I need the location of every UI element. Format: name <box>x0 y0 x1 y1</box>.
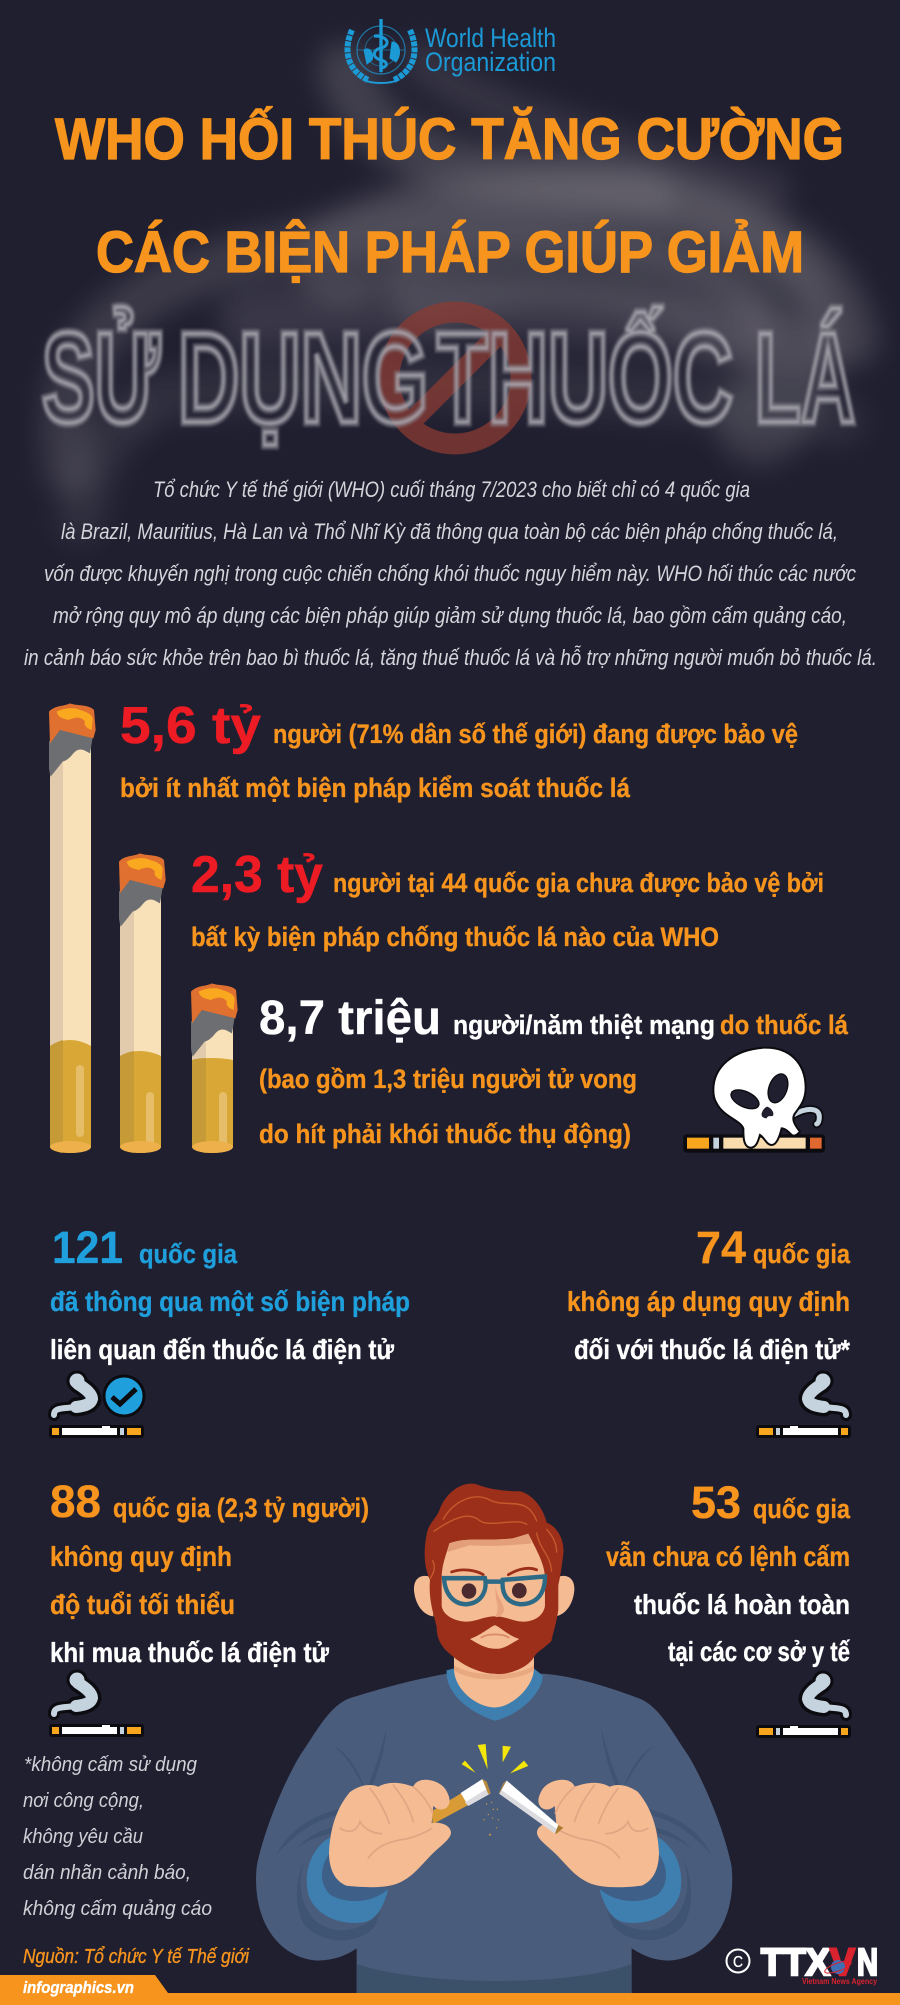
stat: 5,6 tỷ: bởi ít nhất một biện pháp kiểm soát thuốc lá <box>120 773 631 803</box>
icon: tall cigarette 5.6 billion <box>49 703 96 1153</box>
block: 53 countries: tại các cơ sở y tế <box>668 1636 850 1667</box>
logo: TTXVN <box>761 1942 878 1986</box>
block: 74 countries: đối với thuốc lá điện tử* <box>574 1334 850 1365</box>
neck <box>454 1655 534 1709</box>
stat: 5,6 tỷ: 5,6 tỷ <box>120 697 261 755</box>
footer label: infographics.vn: infographics.vn <box>23 1978 134 1997</box>
left arm and hand <box>276 1728 451 1940</box>
stat: 2,3 tỷ <box>191 846 824 952</box>
footnote: không cấm quảng cáo <box>23 1898 212 1920</box>
title smoke text: SỬ DỤNG THUỐC LÁ: THUỐC <box>437 307 733 450</box>
icon: smoke cigarette right top <box>756 1370 851 1438</box>
block: 88 countries: 88 <box>50 1476 101 1527</box>
icon: smoke cigarette left bottom <box>49 1670 144 1737</box>
footnote: dán nhãn cảnh báo, <box>23 1862 191 1884</box>
footer bar <box>0 1975 900 2005</box>
stat: 8,7 triệu <box>259 992 849 1149</box>
block: 121 countries <box>50 1222 410 1365</box>
sweater hem <box>357 1964 632 1994</box>
illustration: man breaking cigarette <box>256 1484 732 1994</box>
title smoke text: SỬ DỤNG THUỐC LÁ: DỤNG <box>178 307 428 450</box>
title smoke text: SỬ DỤNG THUỐC LÁ: SỬ <box>42 307 161 450</box>
icon: short cigarette 8.7 million <box>191 983 238 1153</box>
block: 53 countries: thuốc lá hoàn toàn <box>634 1589 850 1620</box>
block: 121 countries: đã thông qua một số biện pháp <box>50 1286 410 1317</box>
footnote <box>23 1754 212 1920</box>
stat: 2,3 tỷ: bất kỳ biện pháp chống thuốc lá nào của WHO <box>191 922 719 952</box>
intro paragraph <box>24 477 877 670</box>
nose <box>495 1585 504 1617</box>
block: 121 countries: 121 <box>52 1222 123 1273</box>
block: 88 countries: không quy định <box>50 1541 232 1572</box>
stat: 8,7 triệu: người/năm thiệt mạng <box>453 1010 715 1040</box>
face <box>442 1534 545 1622</box>
logo: TTXVN: TTX <box>761 1942 831 1984</box>
hair strands <box>431 1497 557 1578</box>
stat: 8,7 triệu: 8,7 triệu <box>259 992 441 1045</box>
icon: medium cigarette 2.3 billion <box>119 853 166 1153</box>
copyright symbol: C <box>733 1954 743 1971</box>
sweater <box>256 1674 732 1994</box>
block: 88 countries <box>50 1476 369 1668</box>
logo: TTXVN: N <box>857 1942 878 1984</box>
icon: smoke cigarette with check badge <box>49 1370 144 1438</box>
logo: TTXVN: Vietnam News Agency <box>802 1977 877 1986</box>
ears <box>414 1576 433 1616</box>
stat: 5,6 tỷ <box>120 697 798 803</box>
glasses <box>444 1576 545 1604</box>
icon: prohibition sign <box>389 312 521 444</box>
block: 53 countries: vẫn chưa có lệnh cấm <box>606 1541 850 1572</box>
footnote: nơi công cộng, <box>23 1790 144 1812</box>
block: 88 countries: khi mua thuốc lá điện tử <box>50 1637 330 1668</box>
block: 74 countries: không áp dụng quy định <box>567 1286 850 1317</box>
stat: 2,3 tỷ: người tại 44 quốc gia chưa được bảo vệ bởi <box>333 868 824 898</box>
block: 74 countries <box>567 1222 851 1365</box>
icon: smoke cigarette right bottom <box>756 1670 851 1738</box>
footnote: không yêu cầu <box>23 1826 143 1848</box>
logo text: World Health Organization: Organization <box>425 47 556 77</box>
smoke backdrop <box>67 60 850 520</box>
logo text: World Health Organization: World Health <box>425 23 556 53</box>
stat: 8,7 triệu: (bao gồm 1,3 triệu người tử vong <box>259 1064 637 1094</box>
stat: 2,3 tỷ: 2,3 tỷ <box>191 846 323 904</box>
stat: 8,7 triệu: do thuốc lá <box>720 1010 849 1040</box>
right arm and hand <box>537 1728 712 1940</box>
eyes <box>462 1583 476 1599</box>
cigarette left half <box>432 1779 491 1824</box>
mouth <box>470 1625 519 1649</box>
stat: 5,6 tỷ: người (71% dân số thế giới) đang được bảo vệ <box>273 719 798 749</box>
stat: 8,7 triệu: do hít phải khói thuốc thụ động) <box>259 1119 631 1149</box>
title smoke text: SỬ DỤNG THUỐC LÁ: DỤNG <box>178 307 428 450</box>
logo text: World Health Organization <box>425 23 556 77</box>
icon: skull on cigarette <box>683 1048 825 1153</box>
block: 74 countries: quốc gia <box>753 1239 851 1269</box>
block: 88 countries: độ tuổi tối thiểu <box>50 1589 235 1620</box>
block: 121 countries: quốc gia <box>139 1239 238 1269</box>
copyright symbol <box>726 1950 750 1972</box>
hair and beard <box>425 1484 564 1674</box>
block: 53 countries: 53 <box>691 1477 741 1528</box>
source: Nguồn: Tổ chức Y tế Thế giới <box>23 1946 249 1968</box>
block: 53 countries: quốc gia <box>753 1494 851 1524</box>
title: WHO HỐI THÚC TĂNG CƯỜNG <box>55 107 844 172</box>
block: 74 countries: 74 <box>696 1222 746 1273</box>
eyebrows <box>452 1568 537 1575</box>
block: 121 countries: liên quan đến thuốc lá điện tử <box>50 1334 395 1365</box>
title smoke text: SỬ DỤNG THUỐC LÁ: THUỐC <box>437 307 733 450</box>
sweater collar <box>447 1669 543 1721</box>
tobacco crumbs <box>483 1802 499 1836</box>
icon: WHO emblem <box>347 19 415 83</box>
block: 88 countries: quốc gia (2,3 tỷ người) <box>113 1493 369 1523</box>
footnote: *không cấm sử dụng <box>24 1754 197 1776</box>
title: CÁC BIỆN PHÁP GIÚP GIẢM <box>96 220 804 285</box>
title smoke text: SỬ DỤNG THUỐC LÁ <box>42 307 855 450</box>
title <box>55 107 844 285</box>
title smoke text: SỬ DỤNG THUỐC LÁ: SỬ <box>42 307 161 450</box>
sparks <box>462 1744 528 1774</box>
cigarette right half <box>498 1780 563 1834</box>
logo: TTXVN: V <box>830 1942 856 1984</box>
intro paragraph: Tổ chức Y tế thế giới (WHO) cuối tháng 7/2023 cho biết chỉ có 4 quốc gia <box>153 477 750 502</box>
block: 53 countries <box>606 1477 851 1667</box>
